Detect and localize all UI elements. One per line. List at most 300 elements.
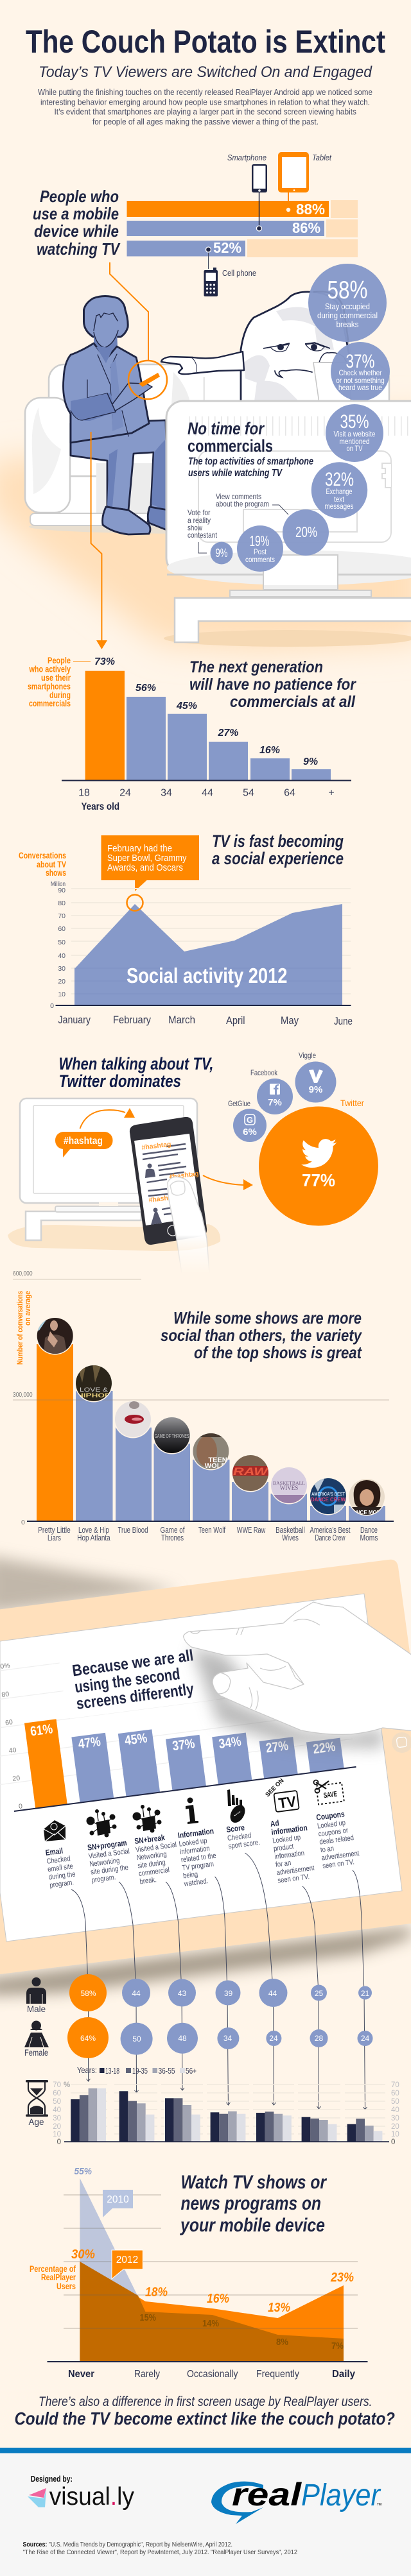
- heading: next generation: commercials at all: [230, 693, 356, 711]
- logo: visual.ly: Designed by:: [31, 2474, 73, 2484]
- axis title: conversations: Conversations: [19, 851, 66, 860]
- bar chart: activity percentages: 22%: [312, 1739, 337, 1757]
- side note: people who actively use: who actively: [29, 665, 71, 674]
- bar chart: age by activity: 0: [57, 2138, 61, 2146]
- thumbnail: teen wolf: WOLF: [205, 1462, 225, 1470]
- bar: smartphone 86%: 86%: [292, 219, 320, 236]
- heading: twitter dominates: When talking about TV,: [59, 1054, 213, 1073]
- callout: february: February had the: [107, 844, 172, 854]
- bar chart: activity percentages: 27%: [265, 1738, 290, 1756]
- text: sn+program: SN+program: [87, 1839, 127, 1852]
- phone: #hashtag: [141, 1140, 171, 1152]
- bubble: 35%: [326, 404, 383, 462]
- icon: hourglass: Age: [28, 2117, 44, 2127]
- heading: watch tv shows: your mobile device: [179, 2215, 325, 2236]
- text: information: Information: [177, 1827, 214, 1840]
- bar: smartphone 86%: [127, 192, 358, 237]
- heading: twitter dominates: [59, 1054, 213, 1091]
- area chart: frequency 2010 vs 2012: Never: [68, 2369, 94, 2380]
- bar chart: age groups: 73%: [94, 656, 115, 667]
- trousers: [71, 420, 168, 530]
- bubbles: male values: [69, 1974, 372, 2011]
- side note: people who actively use: use their: [41, 673, 71, 683]
- text: score: Score: [226, 1824, 245, 1834]
- thumbnail: love and hip hop: HIPHOP: [77, 1392, 111, 1399]
- thumbnail: dance moms: DANCE MOMS: [349, 1510, 385, 1515]
- bubbles: male values: 43: [178, 1989, 186, 1998]
- bubbles: female values: 50: [132, 2034, 141, 2043]
- icon: social network program: [87, 1809, 116, 1837]
- sources: "The Rise of the Connected Viewer", Report by PewInternet, July 2012. "RealPlayer User Surveys", 2012: [23, 2548, 297, 2556]
- area chart: social activity 2012: 90: [58, 887, 66, 894]
- heading: [188, 419, 313, 479]
- bubble: 32%: text: [334, 495, 345, 504]
- area chart: frequency 2010 vs 2012: 30%: [71, 2248, 95, 2262]
- bubbles: female values: 24: [361, 2034, 369, 2043]
- heading: tv social experience: TV is fast becoming: [212, 832, 344, 851]
- phone: [130, 1117, 207, 1245]
- thumbnail: america's best dance crew: AMERICA’S BEST: [311, 1491, 345, 1497]
- logo: realplayer: [211, 2477, 381, 2524]
- area chart: social activity 2012: April: [226, 1014, 245, 1027]
- bubble: 35%: Visit a website: [334, 430, 376, 439]
- bubble: 37% check: [331, 342, 390, 401]
- mouth: [275, 370, 312, 377]
- text: sn+break: Networking: [136, 1850, 168, 1863]
- area chart: social activity 2012: 30: [58, 965, 66, 973]
- shoes: [103, 507, 150, 534]
- icon: score: [227, 1789, 248, 1825]
- subtitle: Today’s TV Viewers are Switched On and Engaged: [39, 64, 372, 81]
- bubble: 9%: [211, 542, 232, 565]
- bar chart: age by activity: 50: [391, 2098, 399, 2106]
- bar chart: activity percentages: 61%: [30, 1721, 54, 1739]
- bar chart: age by activity: 20: [53, 2123, 61, 2131]
- heading: twitter dominates: Twitter dominates: [59, 1071, 181, 1091]
- thumbnail: love and hip hop: LOVE &: [80, 1386, 109, 1394]
- thumbnail: wwe raw: RAW: [233, 1465, 270, 1478]
- callout: 2012: 2012: [116, 2255, 138, 2265]
- text: email: email site: [47, 1862, 74, 1874]
- bubbles: male values: 21: [361, 1989, 369, 1998]
- bubbles: male values: 44: [268, 1989, 277, 1998]
- bar chart: activity percentages: [0, 1619, 356, 1814]
- show labels: Game of: [161, 1526, 185, 1535]
- panel: tablet with second-screen activities: [0, 1560, 411, 1974]
- axis title: [17, 1291, 32, 1365]
- intro text block: While putting the finishing touches on the recently released RealPlayer Android app we noticed some: [38, 87, 372, 97]
- bubble: 35%: mentioned: [339, 437, 370, 446]
- connector lines with arrows: [71, 1853, 367, 2110]
- bar chart: age groups: 45%: [176, 701, 197, 712]
- show labels: Basketball: [275, 1526, 305, 1535]
- bubble: viggle: [295, 1051, 337, 1102]
- callout: february: Super Bowl, Grammy: [107, 853, 187, 864]
- thumbnail: dance moms: [349, 1479, 385, 1515]
- bar chart: activity percentages: 20: [12, 1774, 21, 1783]
- thumbnail: america's best dance crew: [310, 1478, 346, 1515]
- area chart: frequency 2010 vs 2012: 23%: [330, 2271, 354, 2285]
- area chart: social activity 2012: March: [168, 1014, 195, 1026]
- show labels: America’s Best: [310, 1526, 351, 1535]
- text: email: during the: [48, 1870, 76, 1882]
- text: ad information: Looked up: [272, 1833, 301, 1845]
- bubbles: male values: 39: [224, 1989, 232, 1998]
- bar chart: age by activity: [53, 2081, 399, 2146]
- tablet shadow top: [0, 1556, 180, 1614]
- bar chart: age groups: 24: [119, 788, 131, 799]
- tablet frame: [0, 1560, 411, 1974]
- text: information: being: [182, 1870, 198, 1881]
- show labels: Dance Crew: [315, 1533, 345, 1542]
- area: 2012: [80, 2262, 344, 2362]
- bar: cell phone 52%: [127, 239, 358, 269]
- bar chart: top shows: 600,000: [13, 1270, 33, 1277]
- area chart: social activity 2012: 50: [58, 939, 66, 946]
- bubble: getglue: [228, 1099, 267, 1142]
- heading: watch tv shows: news programs on: [181, 2193, 321, 2214]
- bar chart: age by activity: 0: [391, 2138, 395, 2146]
- text: information: information: [180, 1845, 211, 1857]
- arrow: phone to twitter: [203, 1175, 253, 1190]
- text: ad information: seen on TV.: [277, 1873, 310, 1885]
- text: ad information: advertisement: [276, 1864, 315, 1877]
- area chart: frequency 2010 vs 2012: Frequently: [256, 2369, 299, 2380]
- thumbnail: basketball wives: BASKETBALL: [273, 1480, 305, 1486]
- label: view comments: View comments: [216, 492, 261, 501]
- thumbnail: true blood: [114, 1400, 152, 1438]
- illustration: hand on tablet: [184, 1602, 411, 1734]
- bar chart: activity percentages: 40: [8, 1746, 17, 1755]
- bar chart: activity percentages: 60: [4, 1718, 13, 1727]
- bar chart: age by activity: 70: [391, 2081, 399, 2089]
- icon: tablet: Tablet: [312, 153, 332, 162]
- heading: because we are all: [63, 1642, 216, 1719]
- bar chart: age by activity: 40: [391, 2106, 399, 2114]
- heading: people who use a mobile device: People who: [40, 187, 119, 206]
- show labels: Thrones: [161, 1533, 184, 1542]
- area chart: social activity 2012: Social activity 2012: [127, 964, 288, 987]
- area chart: frequency 2010 vs 2012: Users: [57, 2282, 76, 2291]
- area chart: frequency 2010 vs 2012: RealPlayer: [41, 2273, 76, 2282]
- bubble: 32%: 32%: [325, 469, 354, 490]
- show labels: Pretty Little: [38, 1526, 71, 1535]
- bubbles: male values: 58%: [80, 1989, 96, 1998]
- phone: #hashtag: [169, 1170, 199, 1181]
- label: view comments: about the program: [216, 499, 269, 508]
- logo: visual.ly: visual.ly: [49, 2483, 134, 2511]
- bar chart: age by activity: 60: [391, 2090, 399, 2097]
- show labels: Wives: [282, 1533, 299, 1542]
- side note: people who actively use: People: [48, 656, 71, 665]
- orange oval around phone: [128, 361, 167, 399]
- area chart: social activity 2012: June: [334, 1015, 353, 1027]
- bubble: 58% stay occupied: during commercial: [317, 311, 378, 320]
- text: coupons: coupons or: [318, 1826, 349, 1839]
- bubbles: male values: 25: [315, 1989, 323, 1998]
- heading: tv social experience: [212, 832, 344, 868]
- bar chart: age by activity: 50: [53, 2098, 61, 2106]
- bubble: 37% check: or not something: [336, 376, 385, 385]
- bubble: 35%: on TV: [347, 444, 362, 453]
- logo: realplayer: real: [232, 2477, 302, 2512]
- axis title: conversations: about TV: [37, 860, 66, 869]
- peach floor glow: [0, 411, 411, 651]
- intro text block: It’s evident that smartphones are playing a larger part in the second screen viewing habits: [54, 107, 356, 117]
- area chart: social activity 2012: 70: [58, 912, 66, 920]
- area chart: social activity 2012: Million: [51, 880, 66, 888]
- text: information: [177, 1827, 221, 1888]
- text: ad information: for an: [275, 1859, 292, 1869]
- bubble: viggle: Viggle: [299, 1051, 316, 1060]
- area chart: social activity 2012: 60: [58, 925, 66, 933]
- bar chart: age by activity: 10: [53, 2131, 61, 2138]
- icon: coupon: SAVE: [323, 1791, 338, 1800]
- tv base plate: [230, 590, 371, 597]
- icon: female: Female: [24, 2048, 48, 2058]
- heading: next generation: will have no patience for: [189, 676, 356, 694]
- text: coupons: [316, 1809, 361, 1870]
- area chart: frequency 2010 vs 2012: Occasionally: [187, 2369, 238, 2380]
- bubble: 58% stay occupied: breaks: [337, 320, 359, 329]
- text: sn+break: site during: [137, 1858, 166, 1870]
- bubble: facebook: [250, 1068, 293, 1114]
- text: sn+program: [87, 1839, 133, 1884]
- intro text block: for people of all ages making the passive viewer a thing of the past.: [92, 117, 319, 126]
- bar chart: age groups: Years old: [81, 801, 119, 812]
- bubbles: female values: 28: [315, 2034, 323, 2043]
- couch illustration: [25, 364, 389, 534]
- bubble: 35%: 35%: [340, 411, 369, 432]
- icon: information: [186, 1798, 198, 1824]
- illustration: tv with hashtag: [8, 1098, 220, 1274]
- show labels: [38, 1526, 378, 1542]
- bar chart: age by activity: 10: [391, 2131, 399, 2138]
- label: vote: a reality: [188, 516, 211, 525]
- bubble: facebook: 7%: [268, 1097, 282, 1108]
- icon: cell phone: [204, 268, 256, 296]
- area chart: frequency 2010 vs 2012: Rarely: [134, 2369, 160, 2380]
- heading: watch tv shows: Watch TV shows or: [181, 2172, 328, 2193]
- footer: [0, 2448, 411, 2576]
- text: coupons: advertisement: [321, 1849, 360, 1863]
- text: score: Checked: [227, 1831, 252, 1843]
- orange phone: [139, 373, 160, 387]
- bar chart: top shows: 0: [21, 1519, 25, 1526]
- hair and head: [83, 296, 128, 361]
- bar chart: age groups: 44: [202, 788, 213, 799]
- bubble: 20%: 20%: [295, 524, 317, 540]
- text: sn+program: program.: [91, 1873, 116, 1884]
- orange connector line: [110, 262, 148, 361]
- heading: users while watching TV: [188, 468, 283, 479]
- laptop and hand: [319, 353, 347, 363]
- tv neck: [263, 555, 338, 590]
- bar chart: age by activity: 20: [391, 2123, 399, 2131]
- side note: people who actively use: commercials: [29, 699, 71, 708]
- bar chart: activity percentages: 0: [18, 1802, 23, 1811]
- thumbnail: basketball wives: WIVES: [280, 1485, 298, 1491]
- bubble: 37% check: 37%: [345, 351, 375, 372]
- legend: years: [77, 2065, 197, 2076]
- heading: tv social experience: a social experience: [212, 849, 344, 868]
- bubble: 19%: [237, 525, 283, 572]
- bar chart: activity percentages: 37%: [171, 1736, 196, 1753]
- legend: years: 13-18: [105, 2066, 119, 2076]
- icon: hourglass: [26, 2080, 48, 2127]
- show labels: Liars: [48, 1533, 61, 1542]
- axis title: on average: [24, 1291, 32, 1326]
- hand shadow: [191, 1647, 383, 1748]
- bar chart: age by activity: 60: [53, 2090, 61, 2097]
- text: information: Looked up: [179, 1836, 207, 1848]
- heading: variety of shows: While some shows are more: [173, 1308, 362, 1327]
- hashtag bubble: [55, 1132, 113, 1157]
- area chart: frequency 2010 vs 2012: Daily: [332, 2369, 355, 2380]
- axis title: conversations: shows: [46, 868, 66, 878]
- bubble: 19%: comments: [245, 555, 275, 564]
- text: coupons: seen on TV.: [322, 1858, 354, 1870]
- heading: watch tv shows: [179, 2172, 328, 2236]
- bubble: facebook: Facebook: [250, 1068, 278, 1077]
- heading: variety of shows: of the top shows is great: [194, 1343, 362, 1362]
- legend: years: 19-35: [132, 2066, 148, 2076]
- closing text: [14, 2394, 395, 2428]
- intro text block: interesting behavior emerging around how people use smartphones in relation to what they watch.: [40, 98, 370, 107]
- text: coupons: Coupons: [316, 1811, 345, 1822]
- show labels: WWE Raw: [237, 1526, 266, 1535]
- area chart: frequency 2010 vs 2012: 7%: [331, 2341, 344, 2351]
- bar: tablet 88%: 88%: [296, 201, 325, 218]
- thumbnail: basketball wives: [271, 1467, 307, 1504]
- text: ad information: Ad: [270, 1819, 279, 1829]
- sources: Sources: "U.S. Media Trends by Demographic", Report by NielsenWire, April 2012.: [23, 2541, 232, 2548]
- bubble: 32%: Exchange: [326, 487, 353, 496]
- text: ad information: [270, 1816, 316, 1885]
- logo: realplayer: Player: [301, 2478, 381, 2512]
- icon: see on tv: TV: [277, 1793, 297, 1812]
- show labels: Teen Wolf: [198, 1526, 225, 1535]
- axis title: conversations: [19, 851, 66, 878]
- heading: because we are all: using the second: [74, 1665, 181, 1696]
- text: coupons: Looked up: [317, 1818, 346, 1830]
- callout: february: [101, 835, 199, 891]
- icon: email: [44, 1820, 66, 1841]
- bar chart: activity percentages: 34%: [218, 1734, 242, 1752]
- hashtag bubble: #hashtag: [64, 1136, 103, 1147]
- area chart: frequency 2010 vs 2012: 18%: [145, 2285, 168, 2299]
- text: sn+program: Visited a Social: [88, 1847, 130, 1861]
- heading: commercials: [188, 436, 273, 456]
- heading: people who use a mobile device: device while: [34, 221, 119, 241]
- tablet shadow bottom: [0, 1927, 411, 1995]
- icon: male: [26, 1977, 46, 2014]
- bar chart: top shows: 300,000: [13, 1391, 33, 1399]
- heading: next generation: [189, 658, 356, 711]
- callout: 2012: [112, 2250, 143, 2279]
- heading: next generation: The next generation: [189, 658, 323, 676]
- female row: [24, 2017, 372, 2058]
- heading: No time for: [188, 419, 265, 438]
- bar chart: age by activity: 30: [53, 2115, 61, 2122]
- area chart: social activity 2012: January: [58, 1014, 91, 1026]
- thumbnail: wwe raw: [232, 1455, 268, 1492]
- bar chart: activity percentages: 47%: [77, 1734, 101, 1752]
- thumbnail: game of thrones: [153, 1416, 191, 1454]
- heading: variety of shows: social than others, the variety: [161, 1326, 362, 1345]
- thumbnail: love and hip hop: [76, 1365, 112, 1403]
- bubbles: female values: 64%: [80, 2034, 96, 2043]
- icon: smartphone: Smartphone: [227, 153, 267, 162]
- bubble: twitter: Twitter: [340, 1098, 364, 1108]
- icon: tablet: [278, 152, 332, 192]
- thumbnail: game of thrones: GAME OF THRONES: [155, 1433, 189, 1439]
- bar chart: age groups: 34: [161, 788, 172, 799]
- area chart: frequency 2010 vs 2012: 16%: [207, 2292, 229, 2306]
- thumbnail: america's best dance crew: DANCE CREW: [311, 1496, 346, 1503]
- icon: cell phone: Cell phone: [222, 268, 256, 278]
- text: sn+break: commercial: [138, 1866, 170, 1878]
- bubble: 32%: [311, 462, 367, 518]
- jacket: [63, 343, 149, 443]
- illustration: bored potato on couch: [161, 292, 351, 411]
- bubble: 58% stay occupied: [308, 264, 387, 353]
- area chart: social activity 2012: 80: [58, 900, 66, 907]
- bubbles: female values: 48: [178, 2034, 187, 2043]
- heading: people who use a mobile device: [33, 187, 121, 259]
- area chart: frequency 2010 vs 2012: 15%: [140, 2312, 156, 2323]
- area chart: social activity 2012: 40: [58, 952, 66, 960]
- area chart: social activity 2012: 10: [58, 991, 66, 998]
- area chart: frequency 2010 vs 2012: 8%: [276, 2337, 288, 2348]
- icon: see on tv: SEE ON: [264, 1777, 286, 1798]
- phone: #hashtag: [148, 1193, 179, 1204]
- label: vote: contestant: [188, 531, 218, 540]
- legend: years: 56+: [186, 2066, 197, 2076]
- text: email: [45, 1846, 77, 1889]
- text: email: Checked: [46, 1854, 71, 1866]
- bubble: viggle: 9%: [309, 1084, 322, 1095]
- bubble: 9%: 9%: [216, 547, 227, 559]
- bubble: twitter: [259, 1098, 378, 1225]
- side note: people who actively use: [28, 656, 71, 708]
- bar chart: age groups: 27%: [217, 728, 239, 738]
- icon: see on tv: [264, 1777, 299, 1812]
- heading: variety of shows: [161, 1308, 362, 1362]
- bubble: twitter: 77%: [302, 1170, 335, 1190]
- icon: smartphone: [227, 153, 267, 192]
- icon: social network break: [133, 1805, 161, 1832]
- area chart: social activity 2012: 20: [58, 978, 66, 985]
- tablet home button: [392, 1732, 411, 1753]
- panel: no time for commercials (TV): [166, 401, 411, 597]
- text: score: [226, 1822, 260, 1851]
- arc arrow: [80, 1108, 135, 1129]
- bubble: getglue: 6%: [243, 1127, 257, 1138]
- bubble: 37% check: heard was true: [338, 383, 382, 392]
- text: sn+break: [134, 1832, 181, 1886]
- bar chart: activity percentages: 45%: [124, 1730, 148, 1748]
- thumbnail: teen wolf: [191, 1432, 230, 1471]
- tv table: [164, 598, 411, 647]
- heading: because we are all: Because we are all: [71, 1646, 195, 1680]
- bar: cell phone 52%: 52%: [213, 239, 241, 256]
- callout: 2010: 2010: [107, 2194, 129, 2205]
- bar chart: age groups: 9%: [303, 756, 318, 767]
- area: 2010: [80, 2178, 344, 2362]
- bubble: 58% stay occupied: Stay occupied: [325, 302, 370, 311]
- bar chart: age by activity: 70: [53, 2081, 61, 2089]
